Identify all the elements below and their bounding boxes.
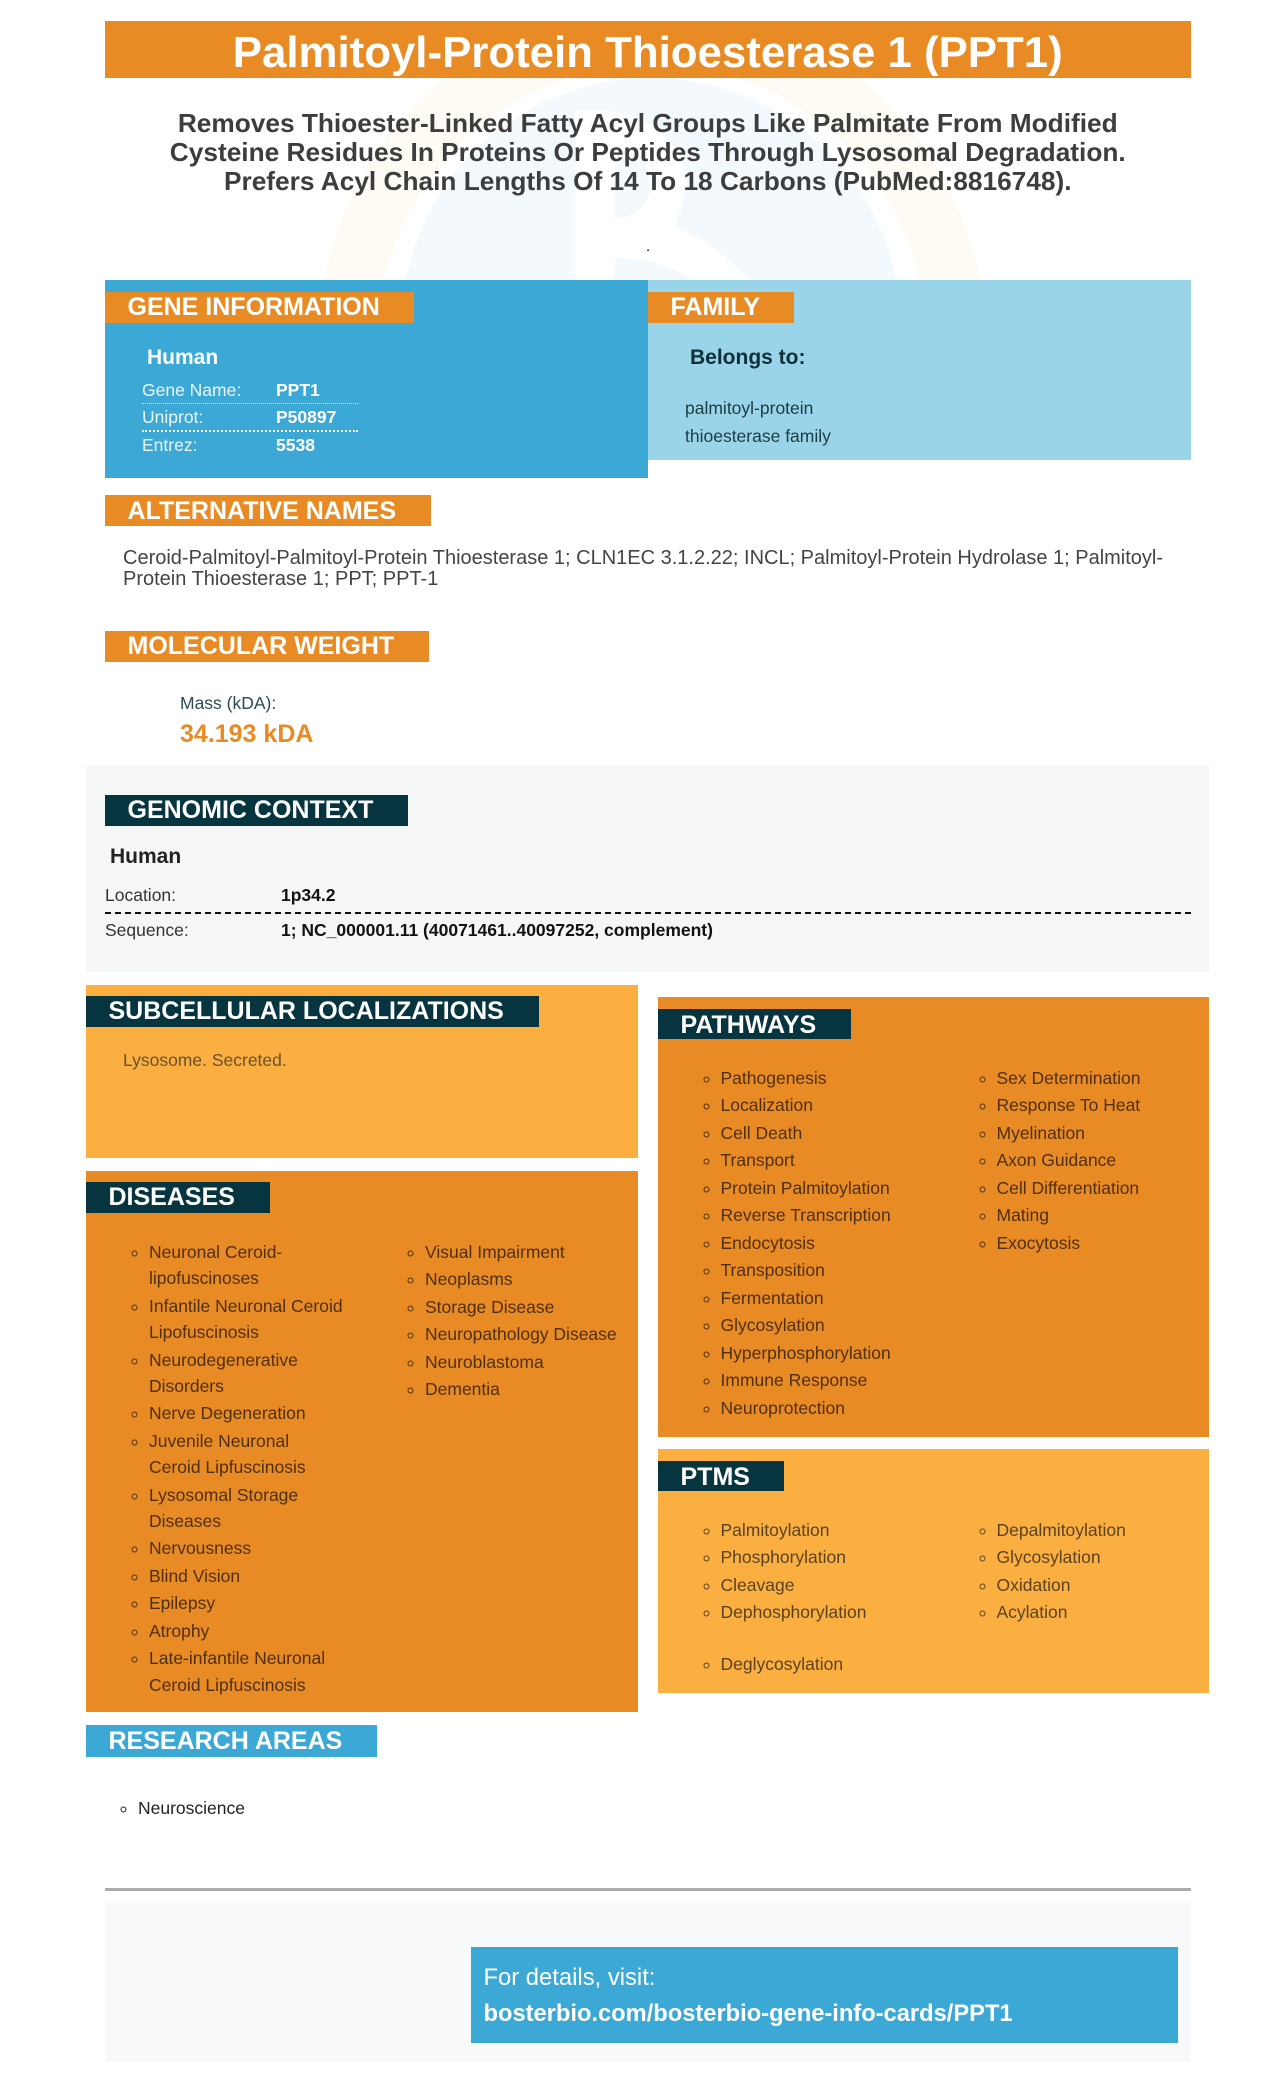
ptms list column 2: Oxidation <box>996 1575 1070 1595</box>
ptms list column 2: Depalmitoylation <box>996 1520 1126 1540</box>
pathways list column 1: Transport <box>720 1150 795 1170</box>
alternative names text: Ceroid-Palmitoyl-Palmitoyl-Protein Thioesterase 1; CLN1EC 3.1.2.22; INCL; Palmitoyl-Protein Hydrolase 1; Palmitoyl- <box>123 546 1163 568</box>
diseases list column 1: Ceroid Lipfuscinosis <box>149 1675 306 1695</box>
sequence row: 1; NC_000001.11 (40071461..40097252, complement) <box>281 920 713 940</box>
heading: family <box>648 292 794 323</box>
ptms list column 1: Palmitoylation <box>720 1520 829 1540</box>
localization text: Lysosome. Secreted. <box>123 1050 287 1070</box>
diseases list column 1: Blind Vision <box>149 1566 240 1586</box>
research areas list: Neuroscience <box>138 1798 245 1818</box>
heading: ptms <box>658 1461 784 1491</box>
gene name row: Gene Name: <box>142 380 241 400</box>
diseases list column 1: Disorders <box>149 1376 224 1396</box>
heading: alternative names: ALTERNATIVE NAMES <box>128 497 396 525</box>
heading: molecular weight: MOLECULAR WEIGHT <box>128 632 394 660</box>
gene name row: PPT1 <box>276 380 320 400</box>
panel: ptms <box>658 1449 1209 1692</box>
location row <box>105 885 335 905</box>
diseases list column 1: Diseases <box>149 1511 221 1531</box>
panel: family <box>648 280 1190 460</box>
subtitle description <box>170 108 1126 196</box>
heading: genomic context: GENOMIC CONTEXT <box>128 796 373 824</box>
ptms list column 1: Cleavage <box>720 1575 794 1595</box>
panel: genomic context <box>86 766 1209 972</box>
ptms list column 1 <box>704 1520 866 1674</box>
mass label: Mass (kDA): <box>180 693 276 713</box>
pathways list column 1: Localization <box>720 1095 813 1115</box>
location row: Location: <box>105 885 176 905</box>
species label: Human <box>147 346 218 369</box>
ptms list column 2: Glycosylation <box>996 1547 1101 1567</box>
heading: research areas: RESEARCH AREAS <box>108 1727 342 1755</box>
location row: 1p34.2 <box>281 885 335 905</box>
pathways list column 1: Cell Death <box>720 1123 802 1143</box>
stray period: . <box>646 238 650 255</box>
pathways list column 2: Mating <box>996 1205 1049 1225</box>
gene name row <box>142 380 320 400</box>
pathways list column 1: Neuroprotection <box>720 1398 845 1418</box>
pathways list column 1: Hyperphosphorylation <box>720 1343 891 1363</box>
family name: thioesterase family <box>685 426 831 446</box>
species label: Human <box>110 845 181 868</box>
pathways list column 1: Endocytosis <box>720 1233 815 1253</box>
diseases list column 2: Neuroblastoma <box>425 1352 544 1372</box>
family name: palmitoyl-protein <box>685 398 813 418</box>
diseases list column 1: Lipofuscinosis <box>149 1322 259 1342</box>
diseases list column 1: Lysosomal Storage <box>149 1485 298 1505</box>
callout: details link <box>471 1947 1178 2043</box>
diseases list column 1: Ceroid Lipfuscinosis <box>149 1457 306 1477</box>
pathways list column 1: Immune Response <box>720 1370 867 1390</box>
pathways list column 1 <box>704 1068 891 1418</box>
pathways list column 1: Pathogenesis <box>720 1068 827 1088</box>
subtitle description: Cysteine Residues In Proteins Or Peptides Through Lysosomal Degradation. <box>170 136 1126 166</box>
diseases list column 2: Neuropathology Disease <box>425 1324 617 1344</box>
ptms list column 1: Phosphorylation <box>720 1547 846 1567</box>
diseases list column 2: Neoplasms <box>425 1269 513 1289</box>
visit label: For details, visit: <box>484 1964 655 1991</box>
ptms list column 2: Acylation <box>996 1602 1068 1622</box>
belongs to label: Belongs to: <box>690 346 806 369</box>
heading: family: FAMILY <box>670 293 760 321</box>
heading: gene information: GENE INFORMATION <box>128 293 380 321</box>
diseases list column 1: Neuronal Ceroid- <box>149 1242 282 1262</box>
diseases list column 1: Neurodegenerative <box>149 1350 298 1370</box>
alternative names text <box>123 546 1163 590</box>
subtitle description: Removes Thioester-Linked Fatty Acyl Groups Like Palmitate From Modified <box>178 108 1118 138</box>
heading: pathways: PATHWAYS <box>680 1011 816 1039</box>
title <box>105 21 1190 78</box>
diseases list column 1: Juvenile Neuronal <box>149 1431 289 1451</box>
ptms list column 1: Dephosphorylation <box>720 1602 866 1622</box>
panel: footer <box>105 1903 1190 2062</box>
pathways list column 2: Exocytosis <box>996 1233 1080 1253</box>
watermark logo <box>324 78 980 280</box>
heading: pathways <box>658 1009 851 1039</box>
pathways list column 1: Protein Palmitoylation <box>720 1178 890 1198</box>
diseases list column 1: Nervousness <box>149 1538 251 1558</box>
diseases list column 1: Atrophy <box>149 1621 209 1641</box>
diseases list column 1: Nerve Degeneration <box>149 1403 306 1423</box>
pathways list column 2: Response To Heat <box>996 1095 1140 1115</box>
uniprot row: Uniprot: <box>142 407 203 427</box>
panel: gene information <box>105 280 648 478</box>
alternative names text: Protein Thioesterase 1; PPT; PPT-1 <box>123 568 438 590</box>
heading: diseases <box>86 1182 270 1213</box>
heading: subcellular localizations: SUBCELLULAR LOCALIZATIONS <box>108 997 504 1025</box>
panel: subcellular localizations <box>86 985 638 1158</box>
pathways list column 2: Axon Guidance <box>996 1150 1116 1170</box>
diseases list column 1: Infantile Neuronal Ceroid <box>149 1296 343 1316</box>
heading: diseases: DISEASES <box>108 1183 235 1211</box>
ptms list column 2 <box>980 1520 1126 1622</box>
entrez row: Entrez: <box>142 435 197 455</box>
entrez row <box>142 435 315 455</box>
ptms list column 1: Deglycosylation <box>720 1654 843 1674</box>
uniprot row <box>142 407 336 427</box>
diseases list column 2: Visual Impairment <box>425 1242 565 1262</box>
panel: pathways <box>658 997 1209 1437</box>
pathways list column 2: Myelination <box>996 1123 1085 1143</box>
pathways list column 1: Reverse Transcription <box>720 1205 891 1225</box>
subtitle description: Prefers Acyl Chain Lengths Of 14 To 18 Carbons (PubMed:8816748). <box>224 166 1072 196</box>
pathways list column 1: Fermentation <box>720 1288 824 1308</box>
heading: ptms: PTMS <box>680 1463 750 1491</box>
url: bosterbio.com/bosterbio-gene-info-cards/PPT1 <box>484 2000 1013 2026</box>
family name <box>685 398 831 446</box>
diseases list column 1 <box>132 1242 343 1695</box>
diseases list column 1: lipofuscinoses <box>149 1268 259 1288</box>
panel: diseases <box>86 1171 638 1712</box>
sequence row: Sequence: <box>105 920 189 940</box>
pathways list column 2: Cell Differentiation <box>996 1178 1139 1198</box>
title: Palmitoyl-Protein Thioesterase 1 (PPT1) <box>233 28 1063 77</box>
pathways list column 1: Transposition <box>720 1260 825 1280</box>
diseases list column 1: Epilepsy <box>149 1593 215 1613</box>
mass value: 34.193 kDA <box>180 720 313 748</box>
diseases list column 2 <box>408 1242 617 1399</box>
uniprot row: P50897 <box>276 407 336 427</box>
entrez row: 5538 <box>276 435 315 455</box>
diseases list column 1: Late-infantile Neuronal <box>149 1648 325 1668</box>
diseases list column 2: Storage Disease <box>425 1297 554 1317</box>
pathways list column 2 <box>980 1068 1140 1253</box>
pathways list column 2: Sex Determination <box>996 1068 1140 1088</box>
diseases list column 2: Dementia <box>425 1379 500 1399</box>
pathways list column 1: Glycosylation <box>720 1315 825 1335</box>
